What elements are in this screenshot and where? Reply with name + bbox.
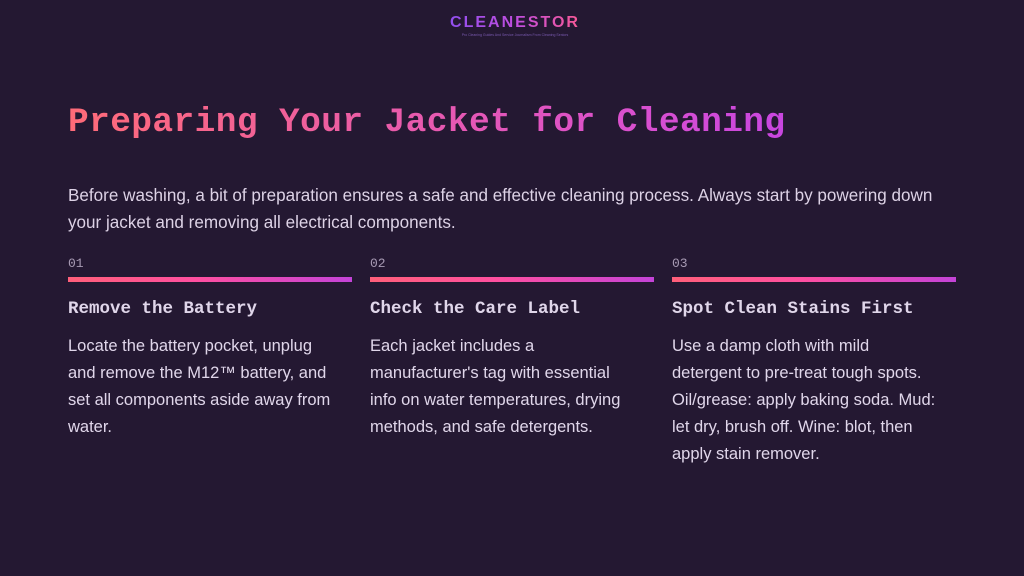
step 3 [672, 256, 956, 463]
step 2: manufacturer's tag with essential [370, 364, 610, 382]
intro text: Before washing, a bit of preparation ensures a safe and effective cleaning process. Always start by powering down [68, 186, 932, 205]
step 2: Each jacket includes a [370, 337, 534, 355]
step 3: Spot Clean Stains First [672, 299, 914, 319]
step 2: methods, and safe detergents. [370, 418, 593, 436]
step 3: Oil/grease: apply baking soda. Mud: [672, 391, 935, 409]
step 2 [370, 256, 654, 436]
step 3: let dry, brush off. Wine: blot, then [672, 418, 913, 436]
step 1: Locate the battery pocket, unplug [68, 337, 312, 355]
intro text [68, 186, 932, 232]
title: Preparing Your Jacket for Cleaning [68, 103, 786, 142]
step 1 [68, 256, 352, 436]
step 3: detergent to pre-treat tough spots. [672, 364, 922, 382]
step 3: apply stain remover. [672, 445, 820, 463]
logo: CLEANESTOR [450, 14, 580, 31]
step 3: 03 [672, 256, 688, 271]
step 1: set all components aside away from [68, 391, 330, 409]
logo: Pro Cleaning Guides And Service Journalism From Cleaning Seniors [462, 33, 568, 37]
step 2: 02 [370, 256, 386, 271]
step 2: Check the Care Label [370, 299, 580, 319]
step 3: Use a damp cloth with mild [672, 337, 869, 355]
step 2: info on water temperatures, drying [370, 391, 620, 409]
intro text: your jacket and removing all electrical components. [68, 213, 456, 232]
step 1: and remove the M12™ battery, and [68, 364, 326, 382]
step 1: water. [68, 418, 112, 436]
step 1: Remove the Battery [68, 299, 257, 319]
step 1: 01 [68, 256, 84, 271]
